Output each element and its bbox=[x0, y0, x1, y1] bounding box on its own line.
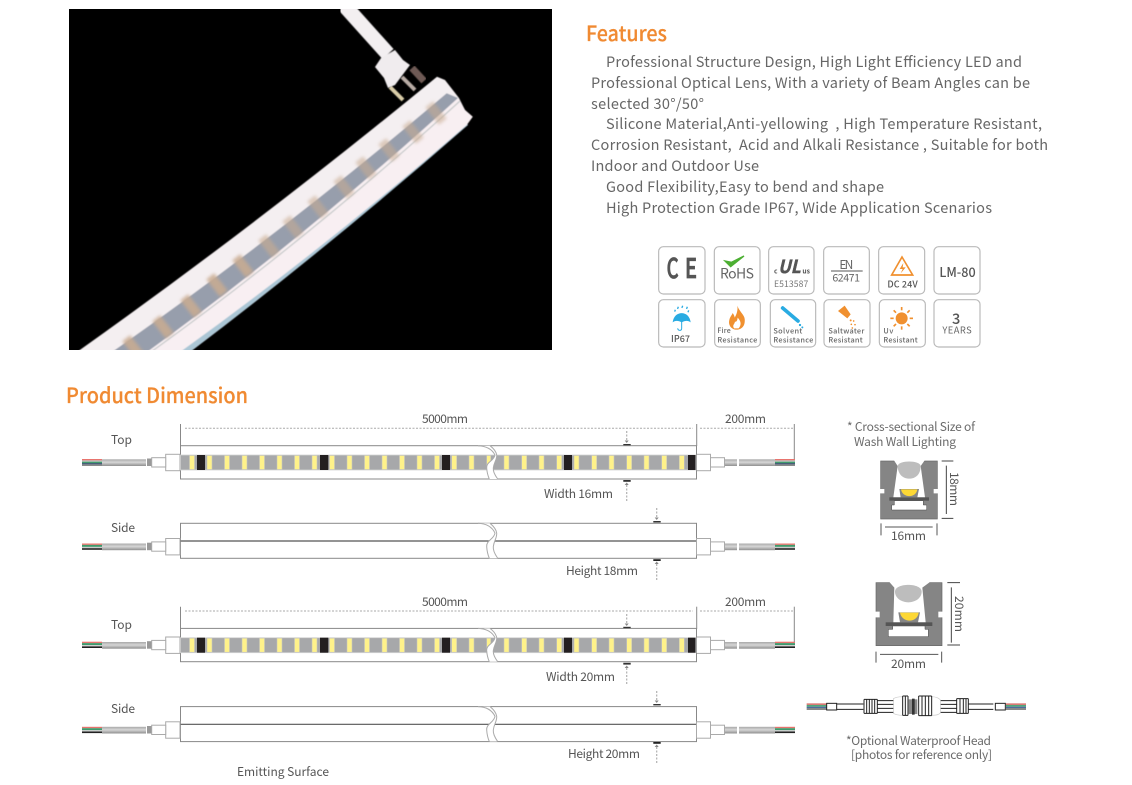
label: 20mm width: 20mm bbox=[891, 655, 926, 672]
icon: solvent resistance bbox=[773, 308, 813, 346]
icon: LM-80: LM-80 bbox=[939, 262, 976, 281]
text: cross-section note bbox=[847, 418, 976, 450]
icon: fire resistance: Resistance bbox=[717, 335, 757, 346]
cross-section 20 x 20 mm bbox=[875, 582, 960, 663]
icon: uv resistant: Resistant bbox=[883, 335, 918, 346]
label: 5000mm second: 5000mm bbox=[422, 593, 468, 610]
text block: features list: selected 30°/50° bbox=[591, 93, 704, 114]
icon: CE bbox=[667, 246, 697, 286]
icon: UL: c bbox=[774, 266, 778, 276]
diagram row 4: side view 20mm bbox=[82, 691, 795, 763]
icon: EN 62471: EN bbox=[839, 256, 853, 273]
heading: Features: Features bbox=[586, 18, 667, 48]
label: 200mm: 200mm bbox=[725, 410, 766, 427]
cross-section 16 x 18 mm bbox=[880, 460, 953, 535]
text block: features list: High Protection Grade IP67, Wide Application Scenarios bbox=[606, 197, 992, 218]
icon: fire resistance bbox=[717, 306, 757, 346]
icon: UL: E513587 bbox=[774, 278, 809, 290]
label: Emitting Surface: Emitting Surface bbox=[237, 763, 329, 780]
icon: RoHS: RoHS bbox=[720, 264, 754, 284]
text: cross-section note: Wash Wall Lighting bbox=[854, 433, 956, 450]
label: Height 18mm: Height 18mm bbox=[566, 562, 638, 579]
icon: IP67 umbrella: IP67 bbox=[671, 332, 690, 345]
text block: features list: Indoor and Outdoor Use bbox=[591, 155, 759, 176]
label: 20mm height: 20mm bbox=[951, 596, 968, 632]
icon: saltwater resistant: Saltwater bbox=[828, 326, 864, 337]
icon: saltwater resistant bbox=[828, 306, 864, 346]
label: 5000mm: 5000mm bbox=[422, 410, 468, 427]
label: Height 20mm: Height 20mm bbox=[568, 745, 640, 762]
icon: UL: us bbox=[802, 266, 811, 276]
icon: 3 years warranty bbox=[941, 308, 972, 337]
icon: CE: E bbox=[685, 246, 697, 286]
diagram row 1: top view 16mm bbox=[82, 424, 795, 501]
icon: DC 24V warning: DC 24V bbox=[887, 278, 918, 291]
icon: uv resistant bbox=[883, 307, 918, 346]
icon: uv resistant: Uv bbox=[883, 326, 893, 337]
icon: EN 62471 bbox=[831, 256, 863, 285]
label: 16mm: 16mm bbox=[891, 527, 926, 544]
label: Top: Top bbox=[111, 431, 132, 448]
icon: DC 24V warning bbox=[887, 257, 918, 291]
icon: solvent resistance: Resistance bbox=[773, 335, 813, 346]
text block: features list: Corrosion Resistant, Acid and Alkali Resistance , Suitable for both bbox=[591, 134, 1048, 155]
icon: solvent resistance: Solvent bbox=[773, 326, 802, 337]
text: cross-section note: * Cross-sectional Size of bbox=[847, 418, 976, 435]
certification badges bbox=[659, 246, 980, 347]
icon: 3 years warranty: 3 bbox=[952, 308, 960, 329]
text block: features list: Professional Structure Design, High Light Efficiency LED and bbox=[606, 51, 1022, 72]
label: 200mm second: 200mm bbox=[725, 593, 766, 610]
label: Width 16mm: Width 16mm bbox=[544, 485, 613, 502]
text: waterproof note bbox=[846, 732, 992, 763]
label: Top second: Top bbox=[111, 616, 132, 633]
icon: EN 62471: 62471 bbox=[832, 270, 860, 285]
text block: features list: Professional Optical Lens, With a variety of Beam Angles can be bbox=[591, 72, 1030, 93]
product photo bbox=[69, 5, 552, 359]
waterproof connector bbox=[807, 696, 1026, 716]
label: 18mm: 18mm bbox=[946, 472, 963, 506]
text block: features list: Good Flexibility,Easy to bend and shape bbox=[606, 176, 884, 197]
icon: UL bbox=[774, 253, 811, 290]
LED glow patches bbox=[122, 101, 447, 359]
heading: Product Dimension: Product Dimension bbox=[66, 380, 248, 410]
diagram row 2: side view 16mm bbox=[82, 508, 795, 580]
label: Side: Side bbox=[111, 519, 135, 536]
metal pins bbox=[390, 68, 424, 100]
cable and plug bbox=[344, 5, 410, 88]
icon: fire resistance: Fire bbox=[717, 326, 731, 336]
label: Width 20mm: Width 20mm bbox=[546, 668, 615, 685]
icon: CE: C bbox=[667, 246, 679, 286]
icon: UL: UL bbox=[778, 253, 801, 279]
text block: features list: Silicone Material,Anti-yellowing , High Temperature Resistant, bbox=[606, 113, 1042, 134]
text: waterproof note: [photos for reference only] bbox=[851, 746, 992, 763]
diagram row 3: top view 20mm bbox=[82, 607, 795, 684]
label: Side second: Side bbox=[111, 700, 135, 717]
icon: saltwater resistant: Resistant bbox=[828, 335, 863, 346]
icon: IP67 umbrella bbox=[671, 305, 691, 345]
text block: features list bbox=[591, 51, 1048, 218]
text: waterproof note: *Optional Waterproof Head bbox=[846, 732, 991, 749]
icon: 3 years warranty: YEARS bbox=[941, 323, 972, 337]
strip body bbox=[77, 77, 473, 352]
